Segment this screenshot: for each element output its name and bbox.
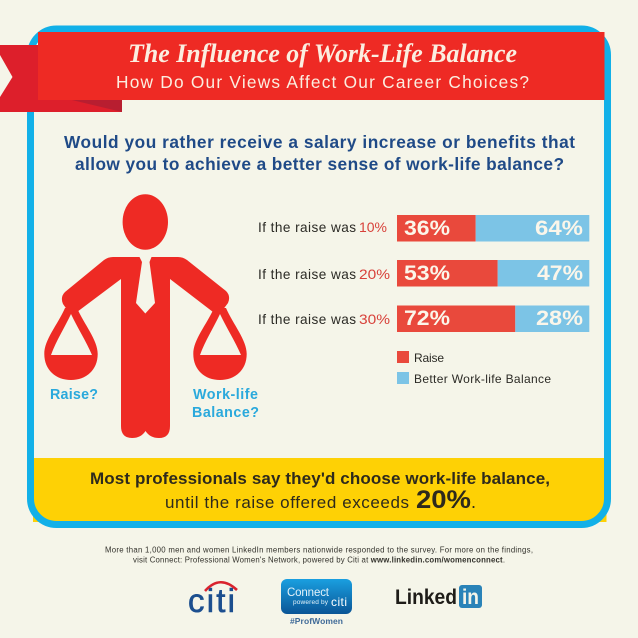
header banner — [0, 32, 604, 112]
takeaway line 2: until the raise offered exceeds — [165, 493, 409, 512]
blue percentage: 28% — [536, 307, 583, 330]
footnote line 1: More than 1,000 men and women LinkedIn members nationwide responded to the survey. For more on the findings, — [105, 546, 533, 554]
legend swatch: balance — [397, 372, 409, 384]
legend swatch: raise — [397, 351, 409, 363]
yellow takeaway band — [33, 458, 606, 522]
blue segment — [476, 215, 589, 242]
question line 1: Would you rather receive a salary increase or benefits that — [64, 132, 575, 152]
red percentage: 72% — [404, 307, 450, 330]
badge citi: citi — [331, 595, 347, 609]
label: work-life: Work-life — [193, 387, 258, 403]
in letters: in — [462, 586, 479, 609]
raise value: 20% — [359, 267, 390, 282]
footnote line 2: visit Connect: Professional Women's Network, powered by Citi at www.linkedin.com/womenconnect. — [133, 556, 505, 564]
takeaway line 1: Most professionals say they'd choose work-life balance, — [90, 469, 550, 488]
label: balance: Balance? — [192, 405, 259, 421]
ribbon tail — [0, 45, 122, 112]
red segment — [397, 306, 515, 332]
red percentage: 53% — [404, 262, 450, 285]
takeaway figure: 20% — [416, 486, 471, 514]
connect word: Connect — [287, 587, 330, 599]
right scale — [193, 308, 247, 380]
blue percentage: 64% — [535, 217, 583, 240]
raise value: 10% — [359, 220, 387, 235]
icon: businessman holding scales — [44, 194, 247, 438]
takeaway text — [90, 469, 550, 514]
logo: connect powered by citi — [281, 579, 352, 614]
chart legend — [397, 351, 551, 386]
survey question — [64, 132, 575, 174]
blue segment — [498, 260, 589, 286]
subtitle: How Do Our Views Affect Our Career Choices? — [116, 72, 529, 92]
raise value: 30% — [359, 312, 390, 327]
red segment — [397, 215, 476, 242]
ribbon fold — [72, 100, 122, 112]
connect badge — [281, 579, 352, 614]
row label: If the raise was — [258, 267, 356, 282]
label: raise: Raise? — [50, 387, 98, 403]
title: The Influence of Work-Life Balance — [128, 39, 517, 68]
row label: If the raise was — [258, 220, 356, 235]
row label: If the raise was — [258, 312, 356, 327]
linked wordmark: Linked — [395, 586, 457, 609]
powered by: powered by — [293, 599, 329, 606]
logo: linkedin — [395, 585, 482, 609]
logo: citi — [188, 582, 237, 619]
red percentage: 36% — [404, 217, 450, 240]
blue rounded frame — [30, 29, 608, 524]
citi arc — [205, 582, 237, 591]
footnote — [105, 546, 533, 564]
row: raise 10% — [258, 215, 589, 242]
scale labels — [50, 387, 259, 421]
body and arms — [62, 257, 229, 438]
left scale — [44, 308, 98, 380]
red segment — [397, 260, 498, 286]
legend label: balance: Better Work-life Balance — [414, 372, 551, 386]
row: raise 20% — [258, 260, 589, 286]
citi wordmark: citi — [188, 582, 235, 619]
blue segment — [515, 306, 589, 332]
tie — [136, 257, 155, 314]
hashtag: #ProfWomen — [290, 616, 343, 626]
takeaway period: . — [471, 492, 476, 512]
legend label: raise: Raise — [414, 351, 444, 365]
blue percentage: 47% — [537, 262, 583, 285]
question line 2: allow you to achieve a better sense of work-life balance? — [75, 154, 564, 174]
banner panel — [38, 32, 604, 100]
row: raise 30% — [258, 306, 589, 332]
head — [123, 194, 168, 250]
stacked bar chart — [258, 215, 589, 332]
in box — [459, 585, 482, 608]
